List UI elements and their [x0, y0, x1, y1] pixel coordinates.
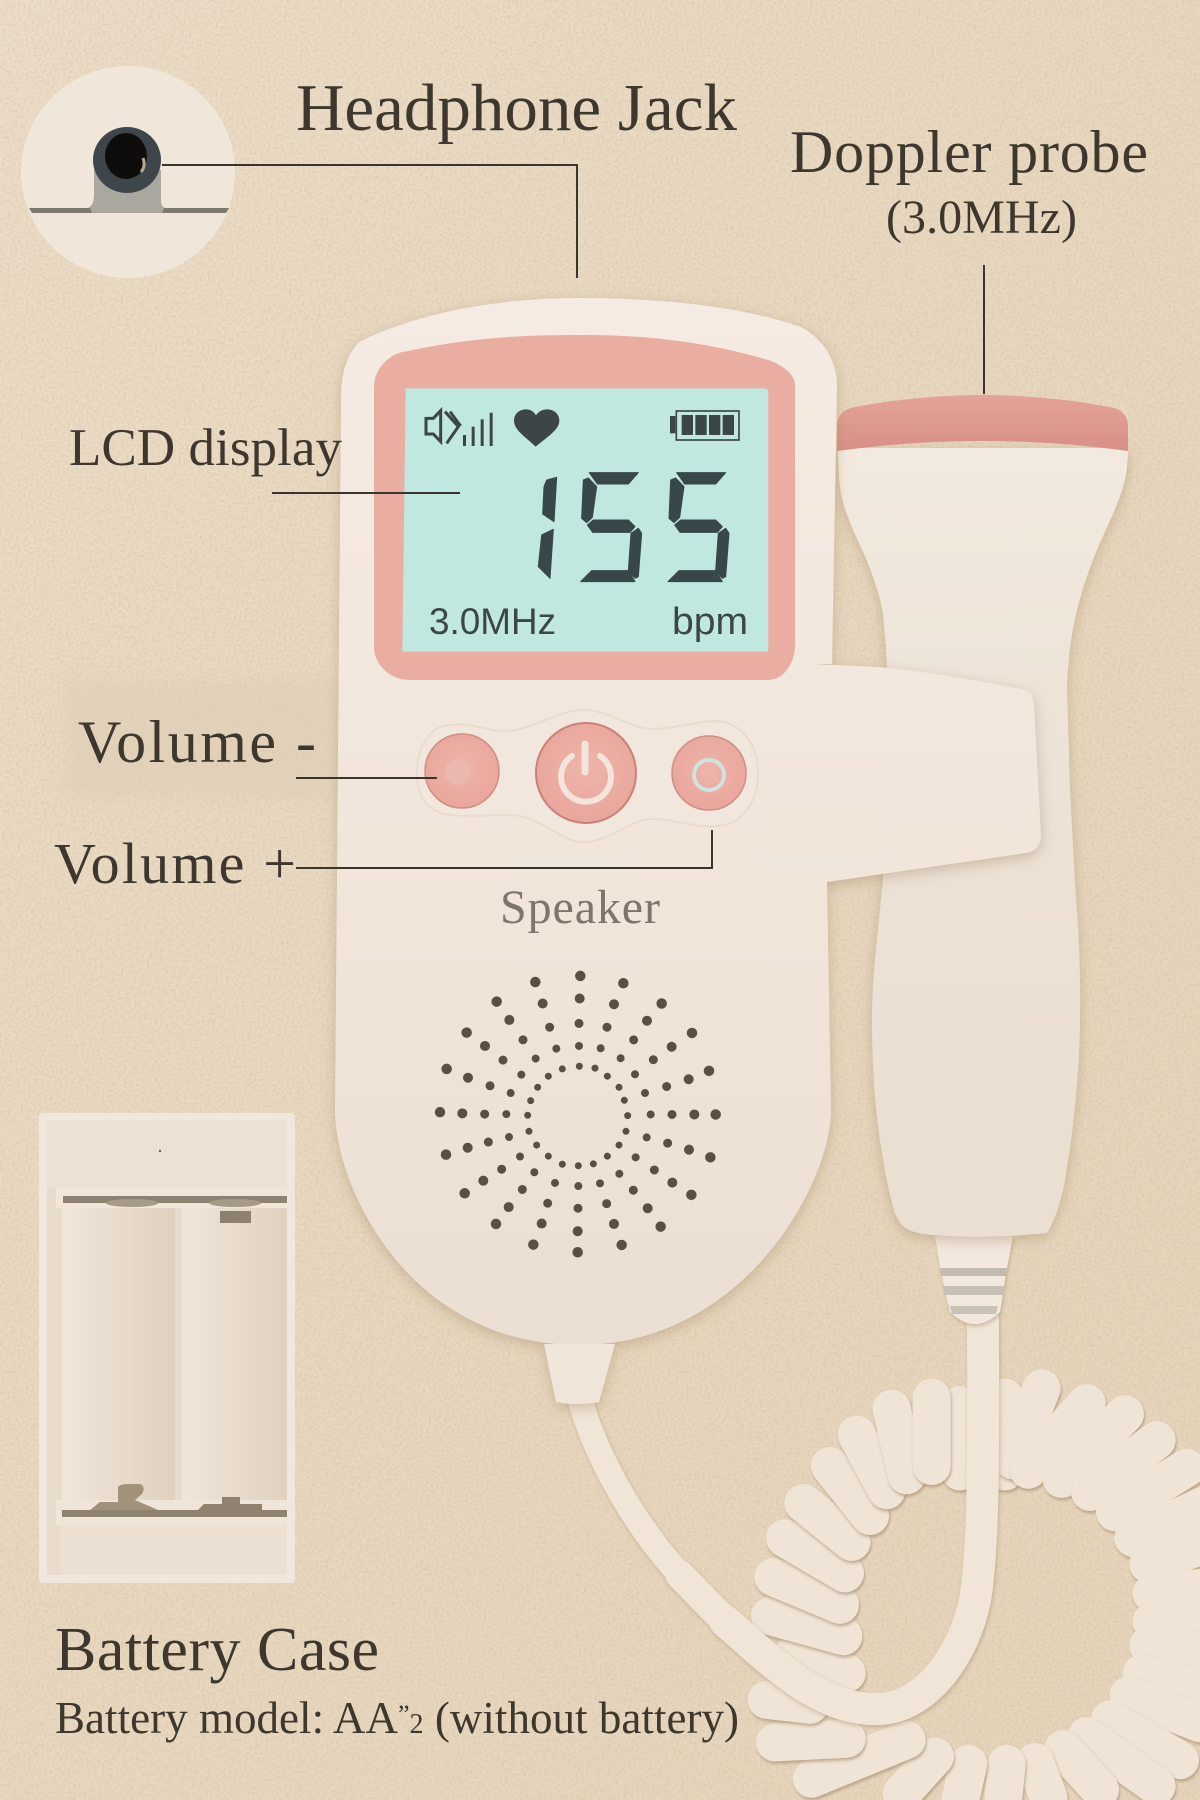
icon: heart	[514, 409, 559, 447]
label: Doppler probe: Doppler probe	[790, 119, 1148, 185]
battery case	[39, 1113, 295, 1583]
button: volume plus	[672, 736, 746, 810]
coiled cable	[767, 1388, 1200, 1800]
label: Speaker: Speaker	[500, 881, 660, 934]
LCD text: 3.0MHz: 3.0MHz	[429, 601, 556, 642]
label: battery model: Battery model: AA	[55, 1693, 398, 1743]
LCD screen	[402, 388, 768, 652]
leader: headphone jack	[162, 165, 577, 278]
leader: LCD display	[272, 492, 460, 494]
right bay	[182, 1208, 287, 1500]
LCD bezel and display	[374, 335, 795, 680]
button panel	[417, 710, 758, 842]
speaker grille	[440, 976, 716, 1252]
digits: 155	[538, 473, 729, 582]
probe head pink cap	[837, 395, 1128, 451]
top contact strip	[63, 1196, 287, 1223]
probe strain relief	[935, 1236, 1013, 1324]
label: LCD display: LCD display	[69, 419, 342, 477]
label: battery model: 2	[410, 1709, 424, 1740]
LCD text: bpm: bpm	[672, 601, 748, 643]
left bay	[62, 1208, 175, 1500]
leader: volume minus	[296, 777, 437, 779]
label: battery model: (without battery)	[435, 1693, 739, 1743]
straight cable	[580, 1317, 983, 1709]
leader: volume plus	[296, 830, 712, 868]
label: 3.0MHz: (3.0MHz)	[886, 191, 1077, 244]
bottom contact strip	[56, 1484, 287, 1525]
label: battery model: ”	[398, 1700, 410, 1729]
leader: doppler probe	[983, 265, 985, 394]
label: Volume minus: Volume -	[78, 709, 316, 775]
doppler probe handle	[837, 395, 1128, 1237]
icon: battery	[670, 411, 739, 440]
cable collar	[544, 1344, 615, 1404]
device body	[335, 298, 1041, 1404]
label: Volume plus: Volume +	[54, 831, 296, 896]
label: Battery Case: Battery Case	[55, 1616, 379, 1684]
headphone jack inset	[21, 66, 235, 278]
button: power	[536, 723, 636, 823]
button: volume minus	[425, 734, 499, 808]
title: Headphone Jack: Headphone Jack	[296, 71, 738, 145]
icon: speaker volume	[426, 411, 493, 446]
